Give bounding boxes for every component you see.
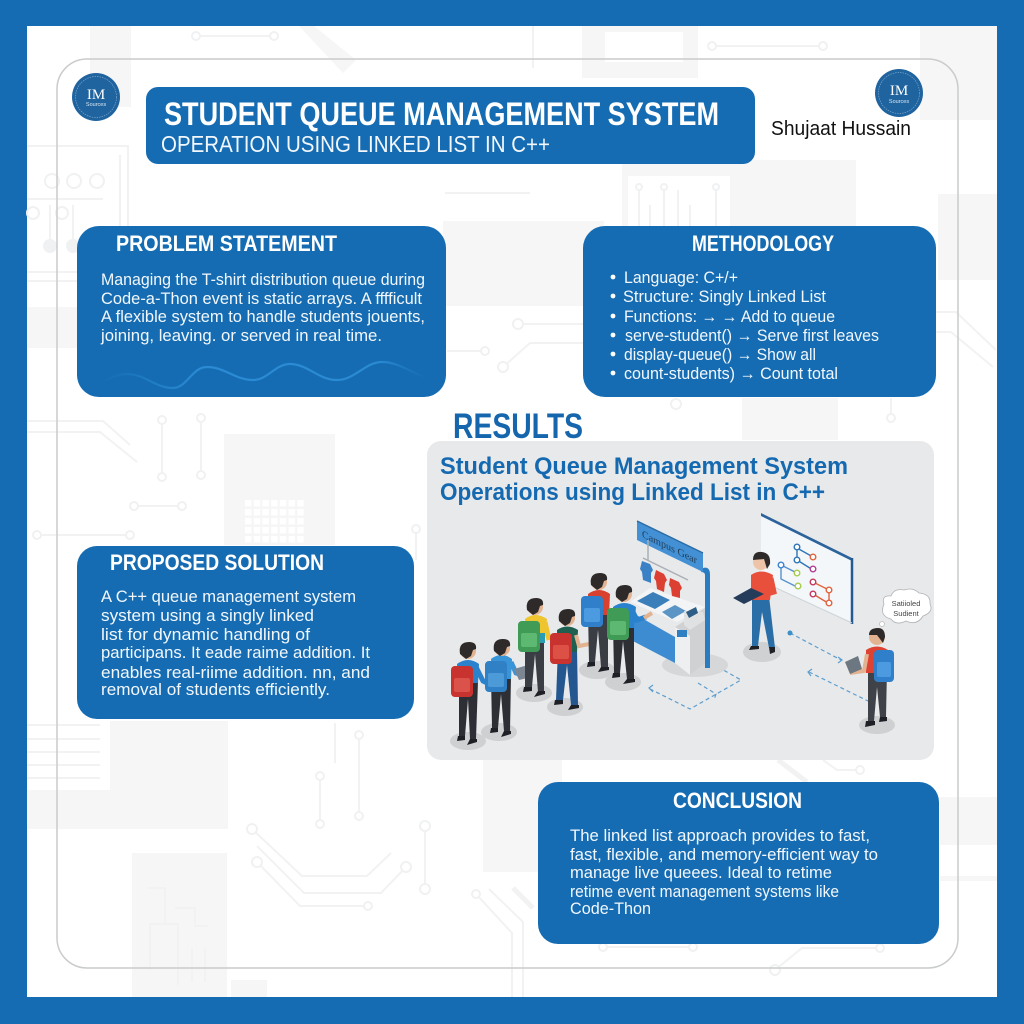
panel: methodology — [583, 226, 936, 397]
person: queue student 3 — [516, 598, 552, 702]
heading: problem statement: PROBLEM STATEMENT — [116, 231, 337, 256]
text: solution description: system using a singly linked — [101, 607, 314, 625]
text: problem description: Code-a-Thon event is static arrays. A fffficult — [101, 290, 422, 308]
subtitle: OPERATION USING LINKED LIST IN C++ — [161, 131, 550, 157]
heading: conclusion: CONCLUSION — [673, 788, 802, 813]
person: presenter with clipboard — [733, 552, 781, 662]
kiosk sign text: Campus Gear — [642, 528, 697, 567]
person: queue student 5 — [579, 573, 615, 679]
panel: conclusion — [538, 782, 939, 944]
illustration: t-shirt kiosk — [630, 521, 728, 677]
person: satisfied student with laptop — [845, 628, 895, 734]
logo: left badge — [72, 73, 120, 121]
logo: left badge: IM — [87, 87, 105, 103]
text: solution description: list for dynamic handling of — [101, 626, 310, 644]
thought bubble: satisfied student: Sudient — [893, 609, 920, 618]
panel: problem statement — [77, 226, 446, 397]
list: methodology items: Language: C+/+ — [624, 269, 738, 287]
list: methodology items — [611, 269, 879, 383]
results title: Student Queue Management System — [440, 453, 848, 480]
illustration: linked list board — [761, 513, 852, 624]
title: STUDENT QUEUE MANAGEMENT SYSTEM — [164, 96, 719, 132]
person: queue student 6 — [605, 585, 652, 691]
results title — [440, 453, 848, 506]
author name: Shujaat Hussain — [771, 118, 911, 140]
panel: results illustration — [427, 441, 934, 760]
list: methodology items: display-queue() → Show all — [624, 346, 816, 364]
decorative wave — [100, 362, 425, 388]
text: solution description: participans. It eade raime addition. It — [101, 644, 370, 662]
list: methodology items: Structure: Singly Linked List — [623, 288, 826, 306]
results title: Operations using Linked List in C++ — [440, 479, 825, 506]
person: queue student 1 — [450, 642, 489, 750]
text: problem description — [100, 271, 425, 345]
list: methodology items: count-students) → Count total — [624, 365, 838, 383]
text: problem description: Managing the T-shirt distribution queue during — [101, 271, 425, 289]
logo: right badge: IM — [890, 83, 908, 99]
list: methodology items: serve-student() → Serve first leaves — [625, 327, 879, 345]
text: solution description — [101, 588, 370, 699]
text: conclusion description: retime event management systems like — [570, 883, 839, 901]
text: conclusion description: fast, flexible, and memory-efficient way to — [570, 846, 878, 864]
text: conclusion description: Code-Thon — [570, 900, 651, 918]
logo: right badge: Sources — [889, 99, 909, 105]
logo: right badge — [875, 69, 923, 117]
text: solution description: enables real-riime addition. nn, and — [101, 664, 370, 682]
heading: methodology: METHODOLOGY — [692, 231, 834, 256]
text: conclusion description — [570, 827, 878, 918]
dashed path arrows — [648, 633, 868, 709]
text: problem description: joining, leaving. or served in real time. — [100, 327, 382, 345]
list: methodology items: Functions: → → Add to queue — [624, 308, 835, 326]
text: solution description: A C++ queue management system — [101, 588, 356, 606]
text: problem description: A flexible system to handle students jouents, — [101, 308, 425, 326]
text: solution description: removal of students efficiently. — [101, 681, 330, 699]
logo: left badge: Sources — [86, 102, 106, 108]
heading: proposed solution: PROPOSED SOLUTION — [110, 550, 324, 575]
title banner — [146, 87, 755, 164]
text: conclusion description: manage live queees. Ideal to retime — [570, 864, 832, 882]
thought bubble: satisfied student: Satiioled — [892, 599, 920, 608]
person: queue student 2 with tablet — [481, 639, 532, 741]
person: queue student 4 — [547, 609, 589, 716]
heading: results: RESULTS — [453, 407, 583, 446]
panel: proposed solution — [77, 546, 414, 719]
text: conclusion description: The linked list approach provides to fast, — [570, 827, 870, 845]
thought bubble: satisfied student — [880, 589, 931, 626]
